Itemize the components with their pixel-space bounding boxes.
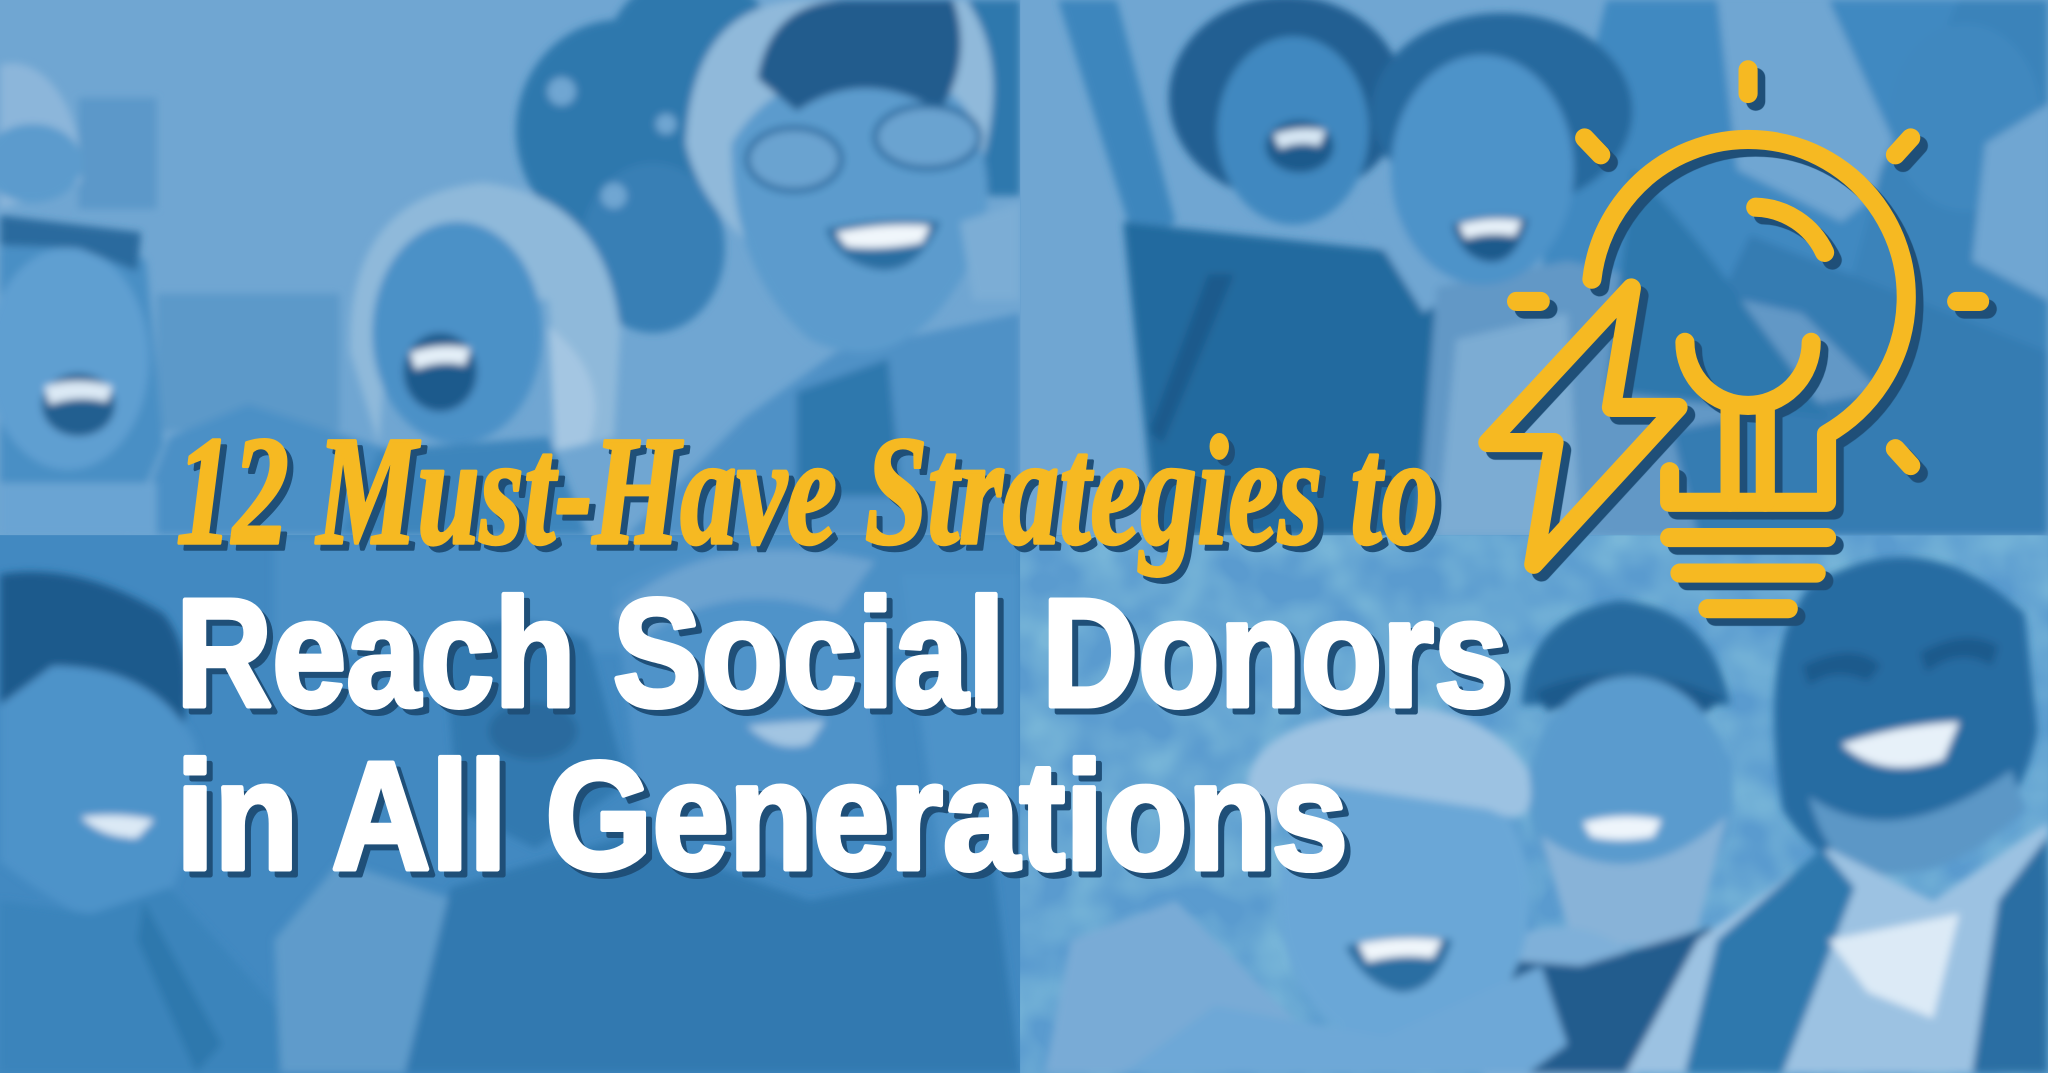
blurred foliage backdrop	[1020, 535, 2048, 1073]
title line: in all generations: in All Generations	[176, 730, 1348, 902]
title line: reach social donors: Reach Social Donors	[176, 567, 1508, 739]
photo: adults, bottom left	[0, 535, 1020, 1073]
icon: light bulb with lightning bolt	[1488, 70, 1980, 609]
icon part: filament	[1685, 342, 1811, 502]
photo: older adults, bottom right	[1020, 535, 2048, 1073]
icon part: bulb highlight	[1756, 207, 1825, 252]
title line: script subtitle: 12 Must-Have Strategies to	[176, 404, 1438, 577]
icon part: base lines	[1670, 538, 1827, 609]
photo: young adults, top right	[1020, 0, 2048, 535]
title block	[176, 404, 1508, 902]
icon part: light rays	[1517, 70, 1980, 466]
icon part: bulb outline and screw collar	[1592, 139, 1906, 502]
icon part: lightning bolt	[1488, 288, 1678, 564]
photo: young adults, top left	[0, 0, 1020, 535]
